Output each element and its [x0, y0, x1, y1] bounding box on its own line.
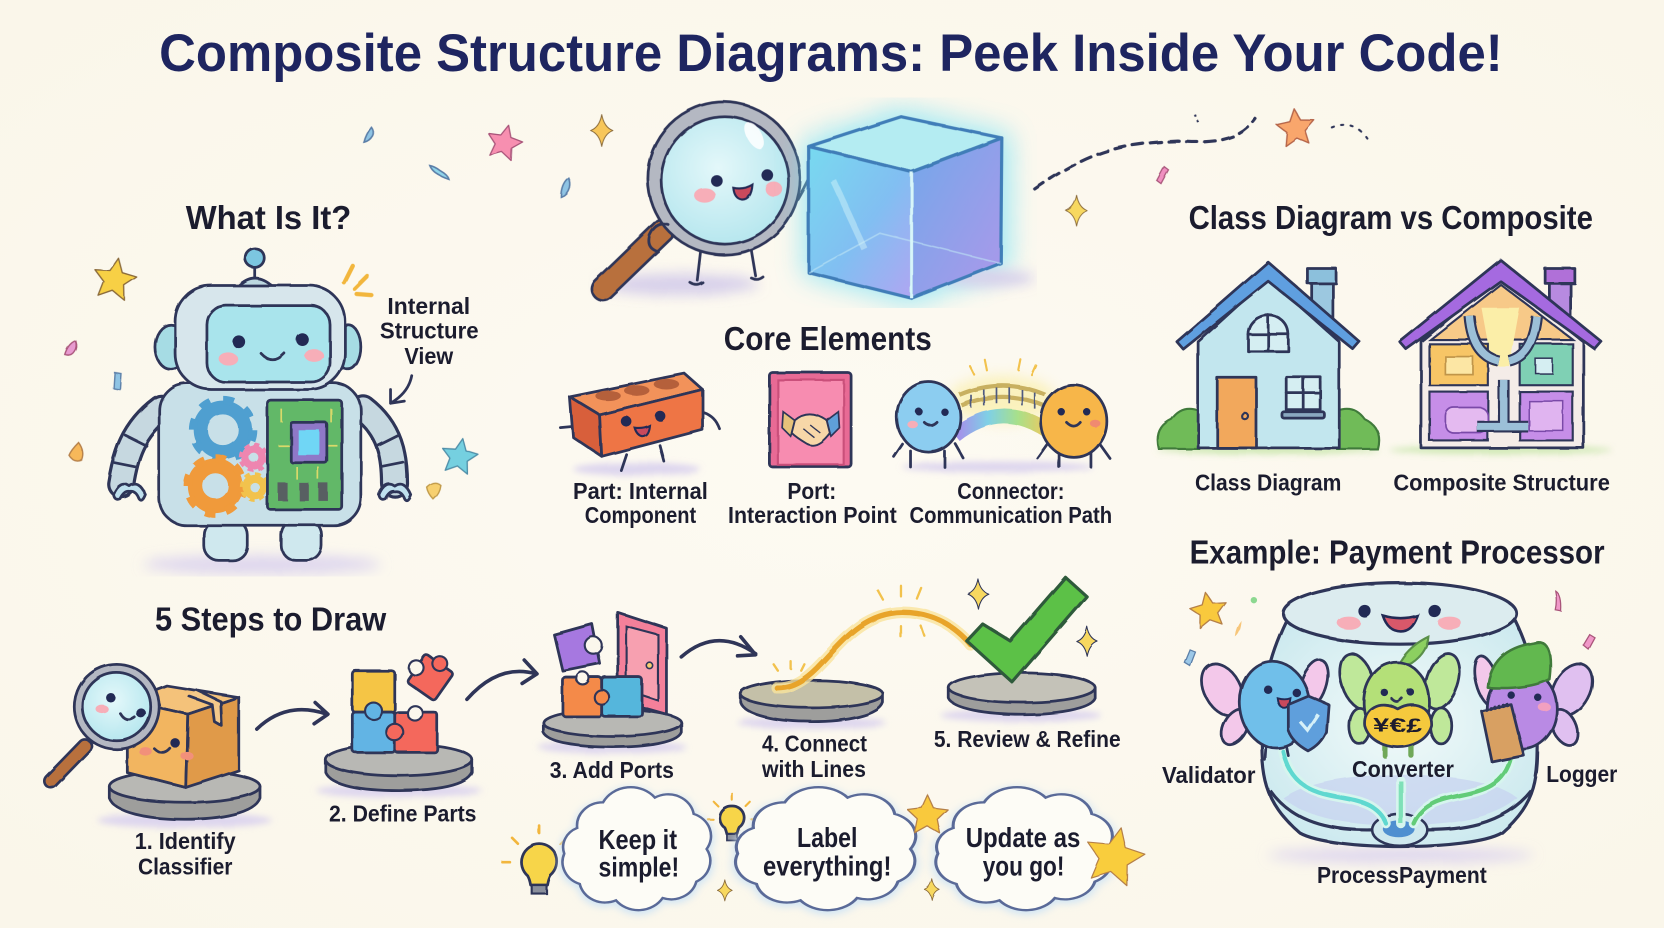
label: step 4: 4. Connect [762, 730, 867, 756]
heading: what is it: What Is It? [186, 199, 351, 236]
label: composite structure: Composite Structure [1393, 469, 1610, 495]
circuit board [267, 400, 342, 509]
label: part: Part: Internal [573, 478, 708, 504]
cloud: keep it simple: Keep it [599, 824, 677, 855]
icon: small light bulb [708, 794, 757, 840]
heading: class diagram vs composite: Class Diagram vs Composite [1189, 199, 1593, 236]
panel: tips clouds [502, 787, 1149, 915]
label: process payment: ProcessPayment [1317, 862, 1487, 888]
arrow: step 2 to 3 [467, 660, 537, 699]
label: internal structure view: Structure [380, 318, 479, 344]
heading: core elements: Core Elements [724, 320, 932, 357]
gear: pink [241, 445, 266, 470]
panel: class diagram vs composite [1157, 199, 1612, 495]
label: step 1: Classifier [138, 853, 232, 879]
label: step 5: 5. Review & Refine [934, 726, 1121, 752]
label: logger: Logger [1546, 761, 1617, 787]
label: port: Interaction Point [728, 502, 897, 528]
step 4: glowing connection line on pedestal [738, 586, 971, 729]
icon: class diagram house [1157, 262, 1380, 454]
character: validator fairy [1194, 656, 1334, 760]
label: connector: Communication Path [909, 502, 1112, 528]
label: connector [909, 478, 1112, 528]
cloud: update as you go [933, 787, 1115, 915]
step 2: puzzle pieces on pedestal [316, 643, 482, 797]
step 3: puzzle and door on pedestal [538, 612, 687, 753]
label: step 3: 3. Add Ports [550, 757, 674, 783]
icon: brick part [560, 374, 720, 475]
gear: orange [188, 458, 243, 514]
heading: 5 steps to draw: 5 Steps to Draw [155, 600, 387, 637]
icon: connector characters with rainbow bridge [894, 360, 1110, 472]
cloud: label everything: everything! [763, 851, 891, 882]
label: part [573, 478, 708, 528]
decorative confetti and stars, top [364, 106, 1367, 226]
label: converter: Converter [1352, 756, 1454, 782]
cloud: label everything [733, 787, 919, 915]
panel: payment processor example [1162, 534, 1617, 888]
label: step 4: with Lines [761, 756, 866, 782]
character: logger fairy [1470, 642, 1601, 762]
icon: glass jar component with face [1262, 583, 1538, 863]
label: part: Component [585, 502, 696, 528]
label: internal structure view: Internal [387, 293, 470, 319]
icon: composite structure house [1389, 260, 1612, 454]
cloud: label everything: Label [797, 822, 857, 853]
icon: large light bulb [502, 826, 576, 894]
step 1: magnifier and box on pedestal [51, 664, 272, 828]
label: internal structure view [380, 293, 479, 369]
label: connector: Connector: [957, 478, 1064, 504]
icon: tip stars and sparkles [717, 795, 1149, 901]
arrow: step 1 to 2 [257, 703, 328, 729]
label: class diagram: Class Diagram [1195, 469, 1341, 495]
robot illustration [114, 248, 411, 574]
step 5: green check on pedestal [940, 577, 1102, 722]
gear: blue [193, 400, 253, 460]
icon: glowing glass cube [802, 108, 1035, 306]
cloud: update as you go: Update as [966, 822, 1080, 853]
title: Composite Structure Diagrams: Peek Inside Your Code! [159, 24, 1503, 83]
cloud: update as you go: you go! [983, 851, 1064, 882]
character: converter fairy [1333, 637, 1466, 756]
cloud: keep it simple [559, 787, 714, 915]
label: step 4 [761, 730, 867, 782]
connectors: cables to process payment [1283, 751, 1511, 824]
label: port [728, 478, 897, 528]
label: internal structure view: View [404, 343, 454, 369]
icon: magnifying glass mascot [600, 102, 819, 295]
label: port: Port: [787, 478, 836, 504]
label: step 1 [135, 828, 236, 879]
label: step 2: 2. Define Parts [329, 800, 477, 826]
gear: yellow [242, 474, 267, 500]
cloud: keep it simple: simple! [599, 852, 679, 883]
icon: port door with handshake [769, 372, 851, 467]
currency symbols: ¥€£ [1373, 715, 1422, 737]
panel: core elements [560, 320, 1112, 528]
arrow: to robot [391, 376, 412, 403]
icon: stars and confetti around robot [65, 255, 481, 499]
label: step 1: 1. Identify [135, 828, 236, 854]
heading: example payment processor: Example: Payment Processor [1190, 534, 1605, 571]
arrow: step 3 to 4 [681, 637, 756, 657]
panel: what is it [65, 199, 481, 574]
panel: 5 steps to draw [51, 577, 1121, 879]
label: validator: Validator [1162, 762, 1255, 788]
icon: stars and confetti around jar [1184, 589, 1595, 665]
